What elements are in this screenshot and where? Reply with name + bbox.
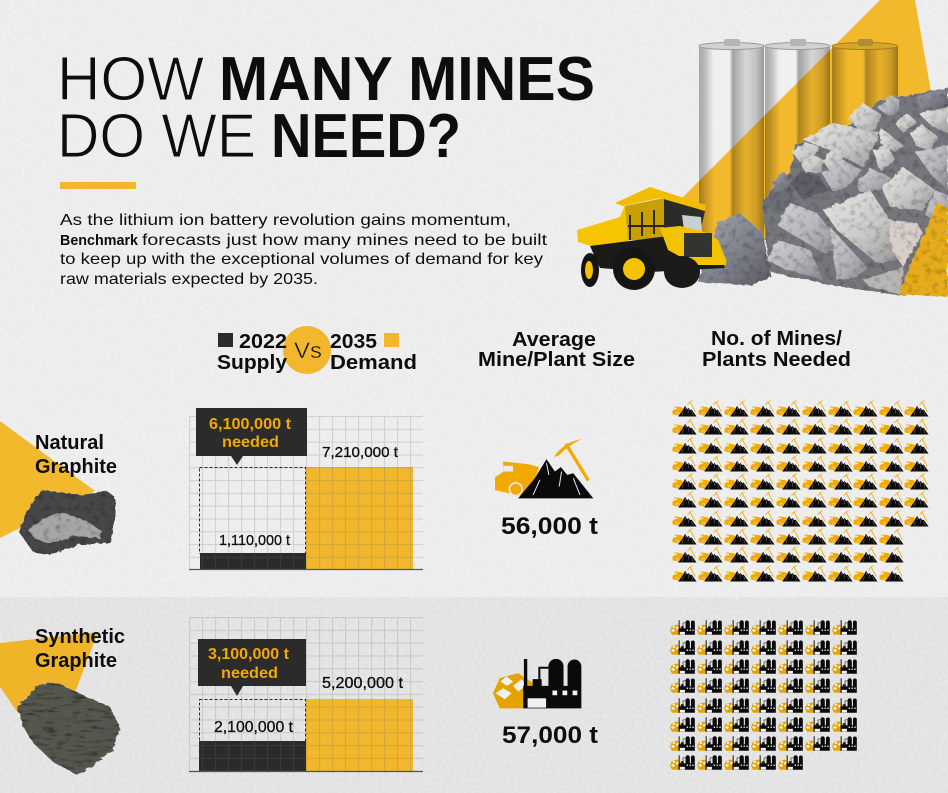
column header: average size: Mine/Plant Size	[478, 348, 635, 371]
label: Synthetic	[35, 626, 125, 648]
callout: needed	[222, 434, 279, 451]
chart: synthetic graphite: 5,200,000 t	[322, 675, 404, 692]
demand bar	[306, 699, 413, 771]
title	[57, 45, 595, 171]
title: NEED?	[271, 102, 461, 171]
icon: truck, mountain and pick	[495, 439, 593, 498]
plants needed pictogram	[670, 620, 857, 770]
supply bar	[199, 741, 306, 771]
average mine size	[495, 439, 598, 540]
gap outline	[200, 700, 306, 742]
title accent bar	[60, 182, 136, 189]
ore pile	[698, 88, 948, 296]
chart: natural graphite: 7,210,000 t	[322, 445, 398, 461]
icon: ore and processing plant	[493, 659, 581, 708]
natural graphite label block	[0, 421, 117, 555]
label: Graphite	[35, 456, 117, 478]
column header: mines needed	[702, 327, 851, 371]
column header: supply vs demand: Supply	[217, 351, 288, 374]
dump truck	[577, 187, 727, 290]
column header: supply vs demand: 2022	[239, 330, 287, 353]
intro paragraph: to keep up with the exceptional volumes of demand for key	[60, 251, 543, 268]
intro paragraph: raw materials expected by 2035.	[60, 271, 318, 288]
column header: supply vs demand: Vs	[294, 338, 322, 363]
supply bar	[200, 553, 306, 569]
yellow triangle	[0, 421, 95, 538]
intro paragraph: Benchmark	[60, 233, 139, 249]
gap outline	[200, 468, 306, 554]
title: MANY MINES	[219, 45, 595, 114]
column header: supply vs demand: Demand	[330, 351, 417, 374]
hero illustration: batteries, ore pile and dump truck	[577, 0, 948, 297]
average mine size: 56,000 t	[501, 513, 598, 540]
average plant size	[493, 659, 598, 749]
label	[35, 432, 117, 478]
column header: mines needed: No. of Mines/	[711, 327, 842, 350]
intro paragraph: As the lithium ion battery revolution gains momentum,	[60, 212, 511, 229]
title: DO WE	[57, 102, 256, 171]
callout: 3,100,000 t	[208, 646, 289, 663]
chart: natural graphite	[189, 408, 423, 570]
demand bar	[306, 467, 413, 569]
callout	[196, 408, 307, 465]
column header: average size: Average	[512, 328, 596, 351]
callout: 6,100,000 t	[209, 416, 291, 433]
yellow shape	[0, 632, 98, 713]
mines needed pictogram	[672, 400, 929, 582]
batteries	[699, 39, 898, 240]
synthetic graphite label block	[0, 626, 125, 775]
yellow background triangle	[683, 0, 931, 240]
callout: needed	[221, 665, 278, 682]
callout	[198, 639, 306, 696]
chart: natural graphite: 1,110,000 t	[219, 533, 290, 549]
column header: supply vs demand: 2035	[330, 330, 377, 353]
vs circle	[283, 326, 331, 374]
chart: synthetic graphite: 2,100,000 t	[214, 719, 294, 736]
column header: supply vs demand	[217, 326, 417, 374]
label: Natural	[35, 432, 104, 454]
column header: mines needed: Plants Needed	[702, 348, 851, 371]
title: HOW	[57, 45, 204, 114]
label	[35, 626, 125, 672]
intro paragraph: forecasts just how many mines need to be built	[142, 232, 548, 249]
graphite specimen	[19, 490, 116, 555]
label: Graphite	[35, 650, 117, 672]
yellow sand heap	[898, 203, 948, 297]
column header: average size	[478, 328, 635, 371]
chart: synthetic graphite	[189, 617, 423, 773]
graphite specimen	[17, 683, 120, 775]
intro paragraph	[60, 212, 548, 288]
average plant size: 57,000 t	[502, 722, 598, 749]
